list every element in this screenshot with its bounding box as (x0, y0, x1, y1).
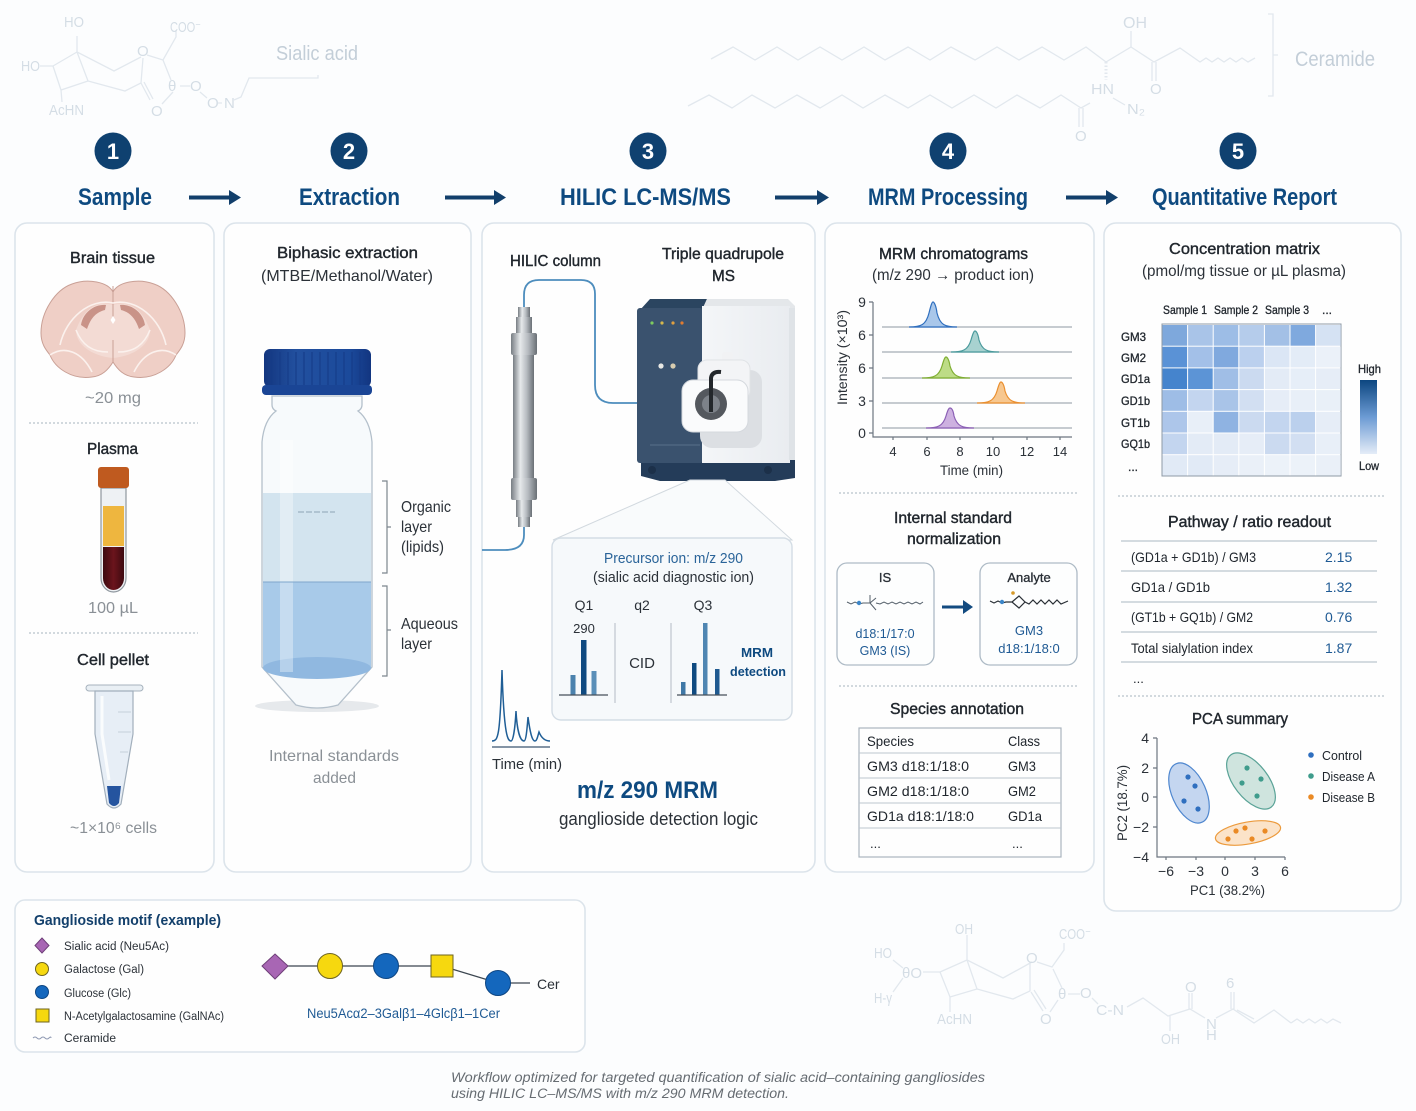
legend: glucose: Glucose (Glc) (64, 988, 131, 1000)
x tick labels: −6 (1158, 863, 1174, 879)
legend title: Ganglioside motif (example) (34, 912, 221, 929)
y axis tick labels: 6 (858, 327, 866, 343)
panel: quantitative report (1104, 223, 1401, 911)
glycan chain diagram: Cer (537, 976, 560, 992)
heading: MRM Processing: MRM Processing (868, 184, 1028, 211)
watermark: sialic acid structure: COO⁻ (170, 19, 201, 36)
watermark: sialic acid structure: θ (168, 78, 176, 95)
watermark: sialic acid structure: AcHN (49, 102, 84, 119)
label: MRM detection: MRM (741, 645, 773, 660)
box: internal standard: d18:1/17:0 (855, 627, 915, 641)
panel: MRM processing (825, 223, 1094, 872)
table: species annotation (859, 728, 1061, 857)
q2 collision cell: CID (629, 655, 655, 672)
watermark: ceramide structure: OH (1123, 15, 1147, 32)
heading: HILIC LC-MS/MS: HILIC LC-MS/MS (560, 184, 731, 211)
watermark: sialic acid structure: O (190, 78, 202, 95)
x tick labels (1158, 863, 1289, 879)
row labels: GM3 (1121, 330, 1146, 344)
watermark: bottom ganglioside structure: O (1040, 1011, 1052, 1028)
table: pathway ratios: Total sialylation index (1131, 640, 1253, 656)
icon: microcentrifuge tube (86, 685, 143, 808)
x axis tick labels (889, 444, 1067, 459)
bracket: organic layer (382, 481, 391, 573)
footnote (451, 1070, 985, 1101)
label: cell pellet: Cell pellet (77, 652, 150, 669)
watermark: ceramide structure: Ceramide (1295, 48, 1375, 71)
legend: GalNAc: N-Acetylgalactosamine (GalNAc) (64, 1011, 224, 1023)
watermark: bottom ganglioside structure: H (1206, 1027, 1217, 1044)
title: internal standard normalization (894, 510, 1012, 548)
x axis tick labels: 4 (889, 444, 897, 459)
table: pathway ratios: 1.32 (1325, 579, 1352, 595)
legend: ceramide (33, 1033, 116, 1045)
label: MRM detection (730, 645, 786, 679)
tubing from column to MS (524, 280, 682, 403)
table: species annotation: GM2 (1008, 783, 1036, 799)
title: MRM chromatograms: MRM chromatograms (879, 246, 1028, 263)
step 2 number badge (330, 132, 368, 170)
Q1 spectrum: 290 (573, 621, 595, 636)
y axis tick labels (858, 294, 866, 441)
table: species annotation: ... (870, 836, 881, 851)
label: triple quadrupole MS: Triple quadrupole (662, 246, 784, 263)
y axis tick labels: 6 (858, 360, 866, 376)
table: pathway ratios: (GT1b + GQ1b) / GM2 (1131, 609, 1253, 625)
label: triple quadrupole MS: MS (712, 268, 735, 285)
watermark: ceramide structure: O (1150, 81, 1162, 98)
label: aqueous layer: Aqueous (401, 616, 458, 633)
x axis tick labels: 10 (986, 444, 1000, 459)
subtitle: solvents: (MTBE/Methanol/Water) (261, 268, 433, 285)
row labels (1121, 330, 1150, 474)
glycan formula: Neu5Acα2–3Galβ1–4Glcβ1–1Cer (307, 1006, 500, 1021)
label: brain tissue: Brain tissue (70, 250, 155, 267)
caption: ~20 mg: ~20 mg (85, 390, 141, 407)
y tick labels (1133, 730, 1149, 865)
table: species annotation: ... (1012, 836, 1023, 851)
watermark: bottom ganglioside structure: N (1206, 1016, 1217, 1033)
caption: cell count: ~1×10⁶ cells (70, 820, 157, 837)
PCA legend: Disease A (1322, 770, 1376, 784)
step 5 number badge: 5 (1232, 139, 1244, 164)
box: analyte (980, 563, 1077, 665)
watermark: sialic acid structure: HO (21, 58, 40, 75)
table: pathway ratios: GD1a / GD1b (1131, 579, 1210, 595)
label: triple quadrupole MS (662, 246, 784, 285)
step 4 number badge (930, 132, 966, 170)
table: pathway ratios: ... (1133, 671, 1144, 686)
legend: ceramide: Ceramide (64, 1033, 116, 1045)
footnote: Workflow optimized for targeted quantification of sialic acid–containing gangliosides (451, 1070, 985, 1085)
title: PCA summary: PCA summary (1192, 711, 1288, 728)
heatmap (1162, 324, 1341, 476)
x axis tick labels: 14 (1053, 444, 1067, 459)
table: pathway ratios: 2.15 (1325, 549, 1352, 565)
y axis label: PC2: PC2 (18.7%) (1114, 765, 1130, 841)
column labels (1163, 303, 1332, 317)
watermark: bottom ganglioside structure: 6 (1226, 975, 1234, 992)
title: species annotation: Species annotation (890, 701, 1024, 718)
watermark: bottom ganglioside structure: O (1080, 985, 1092, 1002)
y tick labels: 4 (1141, 730, 1149, 746)
watermark: sialic acid structure: N (224, 95, 235, 112)
step 2 number badge: 2 (343, 139, 355, 164)
y tick labels: 2 (1141, 760, 1149, 776)
table: species annotation: GM3 d18:1/18:0 (867, 758, 969, 774)
title: biphasic extraction: Biphasic extraction (277, 245, 418, 262)
row labels: GM2 (1121, 351, 1146, 365)
row labels: GD1a (1121, 372, 1150, 386)
x axis tick labels: 6 (923, 444, 931, 459)
PCA legend (1308, 749, 1376, 805)
Q3 spectrum: Q3 (694, 597, 713, 613)
title: internal standard normalization: Internal standard (894, 510, 1012, 527)
step 5 number badge (1220, 132, 1256, 170)
Q1 spectrum (559, 597, 608, 695)
caption: internal standards added: Internal standards (269, 748, 399, 765)
watermark: sialic acid structure: Sialic acid (276, 43, 358, 65)
label: organic layer: Organic (401, 499, 451, 516)
column labels: ... (1322, 303, 1332, 317)
PCA legend: Control (1322, 749, 1362, 763)
y tick labels: −2 (1133, 819, 1149, 835)
y axis label: intensity: Intensity (×10³) (835, 310, 850, 405)
icon: blood tube (98, 467, 129, 592)
row labels: GD1b (1121, 394, 1150, 408)
watermark: bottom ganglioside structure: AcHN (937, 1011, 972, 1028)
axis label: time: Time (min) (492, 756, 562, 773)
y tick labels: −4 (1133, 849, 1149, 865)
row labels: ... (1128, 460, 1138, 474)
color scale legend (1358, 362, 1381, 473)
text: precursor ion: Precursor ion: m/z 290 (604, 551, 743, 567)
color scale legend: Low (1359, 459, 1379, 473)
heading: Sample: Sample (78, 184, 152, 211)
watermark: bottom ganglioside structure: O (1185, 979, 1197, 996)
legend: galactose (36, 962, 144, 976)
y tick labels: 0 (1141, 789, 1149, 805)
panel: ganglioside motif legend (15, 900, 585, 1052)
table: pathway ratios: (GD1a + GD1b) / GM3 (1131, 549, 1256, 565)
step 3 number badge (630, 132, 666, 170)
box: analyte: d18:1/18:0 (998, 641, 1060, 656)
watermark: bottom ganglioside structure: θO (902, 965, 922, 982)
x tick labels: 3 (1251, 863, 1259, 879)
watermark: bottom ganglioside structure: O (1026, 950, 1038, 967)
title: pathway readout: Pathway / ratio readout (1168, 514, 1332, 531)
x axis tick labels: 12 (1020, 444, 1034, 459)
box: analyte: Analyte (1007, 570, 1051, 585)
column labels: Sample 3 (1265, 303, 1309, 317)
x axis label: time: Time (min) (940, 462, 1003, 478)
icon: HILIC column (511, 307, 537, 527)
subtitle: transition: (m/z 290 → product ion) (872, 267, 1034, 284)
label: organic layer (401, 499, 451, 556)
legend: sialic acid: Sialic acid (Neu5Ac) (64, 941, 169, 953)
arrow: extraction to HILIC (445, 190, 506, 205)
table: species annotation: Species (867, 733, 914, 749)
panel: HILIC LC-MS/MS (482, 223, 815, 872)
watermark: bottom ganglioside structure: HO (874, 945, 892, 962)
box: internal standard: GM3 (IS) (860, 644, 910, 658)
table: pathway ratios: 1.87 (1325, 640, 1352, 656)
mini chromatogram (492, 670, 550, 747)
chart: PCA scatter (1153, 738, 1285, 860)
label: HILIC column: HILIC column (510, 253, 601, 270)
PCA legend: Disease B (1322, 791, 1375, 805)
watermark: ceramide structure: N₂ (1127, 101, 1145, 118)
Q3 spectrum (677, 597, 727, 695)
caption: internal standards added: added (313, 770, 356, 787)
y axis tick labels: 3 (858, 393, 866, 409)
box: internal standard (837, 563, 934, 665)
panel: sample (15, 223, 214, 872)
heading: Extraction: Extraction (299, 184, 400, 211)
watermark: bottom ganglioside structure: C-N (1096, 1002, 1124, 1019)
x axis label: PC1: PC1 (38.2%) (1190, 882, 1265, 898)
watermark: bottom ganglioside structure: OH (1161, 1031, 1180, 1048)
caption: 100 uL: 100 µL (88, 600, 138, 617)
chart: stacked chromatograms (869, 302, 1072, 440)
callout: precursor ion logic (552, 538, 792, 720)
y axis tick labels: 9 (858, 294, 866, 310)
label: plasma: Plasma (87, 441, 138, 458)
box: analyte: GM3 (1015, 623, 1043, 638)
watermark: bottom ganglioside structure: OH (955, 921, 973, 938)
bracket: aqueous layer (382, 586, 391, 676)
label: organic layer: (lipids) (401, 539, 444, 556)
watermark: bottom ganglioside structure (874, 921, 1341, 1048)
q2 collision cell (629, 597, 655, 672)
y axis tick labels: 0 (858, 425, 866, 441)
watermark: ceramide structure (688, 14, 1375, 145)
watermark: sialic acid structure: HO (64, 14, 84, 31)
watermark: sialic acid structure: O (151, 103, 163, 120)
step 3 number badge: 3 (642, 139, 654, 164)
footnote: using HILIC LC–MS/MS with m/z 290 MRM detection. (451, 1086, 789, 1101)
arrow: MRM to report (1066, 190, 1118, 205)
label: MRM detection: detection (730, 664, 786, 679)
step 1 number badge (94, 132, 132, 170)
row labels: GT1b (1121, 416, 1150, 430)
watermark: bottom ganglioside structure: H-γ (874, 990, 892, 1007)
legend: galactose: Galactose (Gal) (64, 964, 144, 976)
watermark: bottom ganglioside structure: COO⁻ (1059, 926, 1091, 943)
row labels: GQ1b (1121, 437, 1150, 451)
watermark: sialic acid structure (21, 14, 358, 120)
legend: sialic acid (35, 938, 169, 953)
label: organic layer: layer (401, 519, 433, 536)
icon: mass spectrometer (637, 299, 795, 481)
table: pathway ratios: 0.76 (1325, 609, 1352, 625)
table: species annotation: GM2 d18:1/18:0 (867, 783, 969, 799)
step 4 number badge: 4 (942, 139, 955, 164)
q2 collision cell: q2 (634, 597, 650, 613)
glycan chain diagram (262, 954, 560, 996)
step 1 number badge: 1 (107, 139, 119, 164)
subline: detection logic: ganglioside detection logic (559, 809, 758, 829)
headline: m/z 290 MRM: m/z 290 MRM (577, 777, 718, 804)
caption: internal standards added (269, 748, 399, 787)
panel: extraction (224, 223, 471, 872)
heading: Quantitative Report: Quantitative Report (1152, 184, 1337, 211)
legend: glucose (36, 986, 131, 1000)
x tick labels: 6 (1281, 863, 1289, 879)
title: concentration matrix: Concentration matrix (1169, 241, 1320, 258)
column labels: Sample 1 (1163, 303, 1207, 317)
icon: brain section (41, 281, 185, 377)
label: aqueous layer: layer (401, 636, 433, 653)
table: pathway ratios (1121, 541, 1377, 686)
Q1 spectrum: Q1 (575, 597, 594, 613)
table: species annotation: Class (1008, 733, 1040, 749)
arrow: HILIC to MRM (775, 190, 829, 205)
table: species annotation: GD1a (1008, 808, 1042, 824)
icon: extraction bottle (255, 349, 391, 712)
text: sialic acid diagnostic ion: (sialic acid diagnostic ion) (593, 570, 754, 586)
x tick labels: −3 (1188, 863, 1204, 879)
label: aqueous layer (401, 616, 458, 653)
watermark: ceramide structure: O (1075, 128, 1087, 145)
watermark: sialic acid structure: O (207, 95, 219, 112)
column labels: Sample 2 (1214, 303, 1258, 317)
arrow: sample to extraction (189, 190, 241, 205)
x axis tick labels: 8 (956, 444, 964, 459)
box: internal standard: IS (879, 570, 891, 585)
table: species annotation: GM3 (1008, 758, 1036, 774)
watermark: bottom ganglioside structure: θ (1058, 986, 1066, 1003)
tubing from vial to column (482, 527, 524, 550)
color scale legend: High (1358, 362, 1381, 376)
subtitle: units: (pmol/mg tissue or µL plasma) (1142, 263, 1346, 280)
callout connector lines (553, 480, 792, 540)
arrow: IS to analyte (942, 600, 973, 614)
table: species annotation: GD1a d18:1/18:0 (867, 808, 974, 824)
title: internal standard normalization: normalization (907, 531, 1001, 548)
x tick labels: 0 (1221, 863, 1229, 879)
watermark: ceramide structure: HN (1091, 81, 1114, 98)
watermark: sialic acid structure: O (137, 43, 149, 60)
